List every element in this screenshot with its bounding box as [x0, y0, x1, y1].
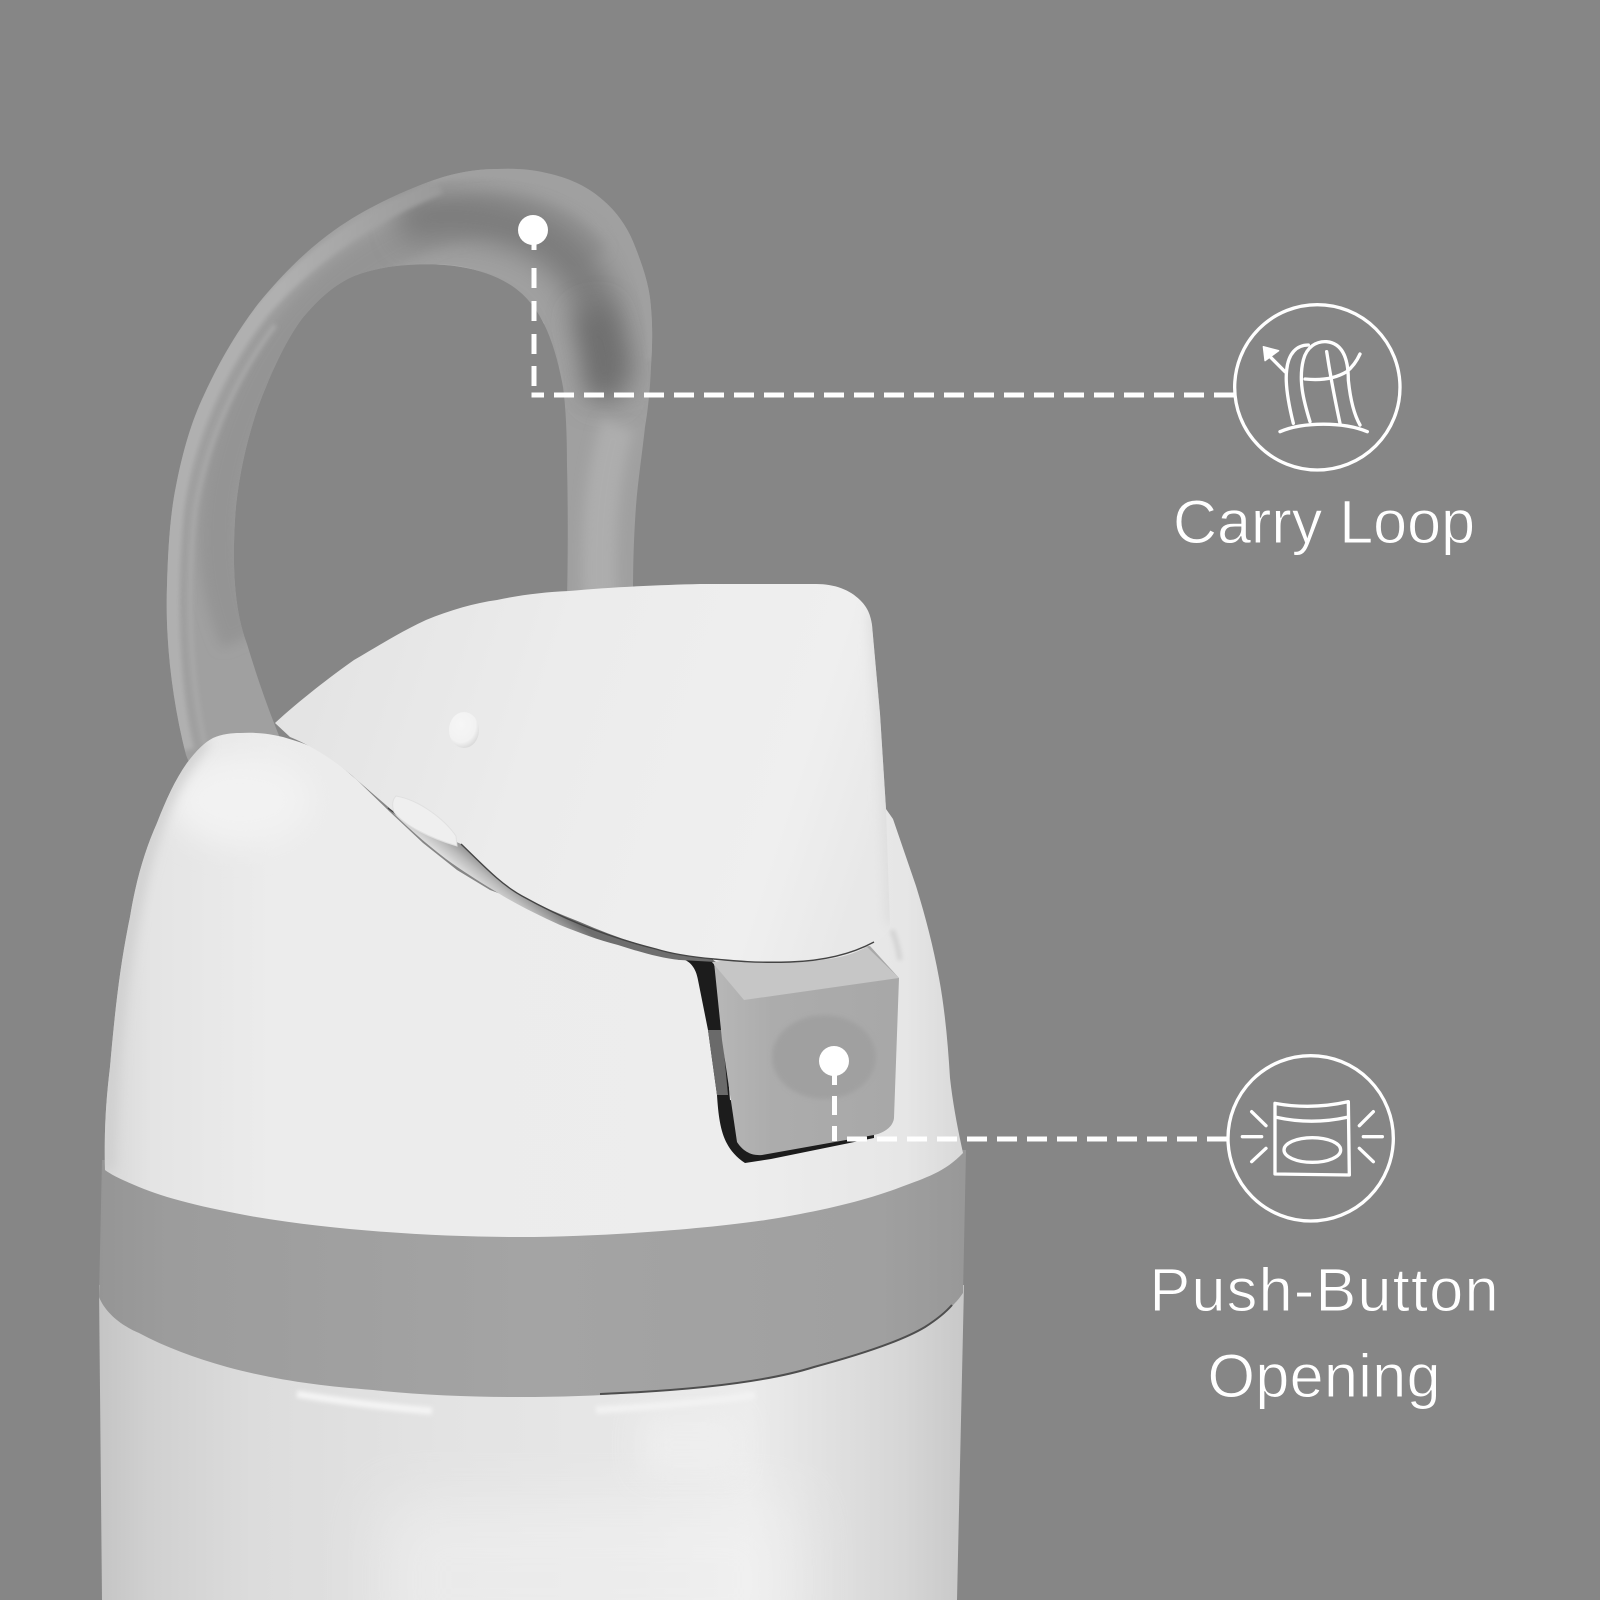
- cap right edge shading: [870, 618, 886, 810]
- body highlights: [296, 1390, 680, 1414]
- bottle: [99, 150, 966, 1600]
- button recess: [679, 955, 874, 1163]
- band lower shadow line: [600, 1305, 952, 1394]
- label: Push-Button Opening: [1150, 1256, 1498, 1410]
- lid shoulder shading: [108, 740, 900, 1170]
- dot: push button: [819, 1046, 849, 1076]
- button recess ellipse: [772, 1015, 876, 1099]
- label: Carry Loop: Carry Loop: [1173, 488, 1475, 556]
- dot: carry loop: [518, 215, 548, 245]
- callout line: carry loop: [518, 215, 1234, 395]
- push button: [712, 946, 899, 1155]
- icon: push button: [1228, 1056, 1393, 1221]
- body lower section: [99, 1285, 964, 1600]
- callout line: push button: [819, 1046, 1228, 1141]
- recess lower shading: [708, 1030, 728, 1095]
- carry loop handle: [166, 168, 652, 761]
- button top facet: [712, 946, 899, 1000]
- label: Push-Button Opening: Push-Button: [1150, 1256, 1498, 1324]
- rivet: [449, 712, 479, 748]
- button front: [714, 946, 899, 1155]
- icon: carry loop: [1235, 305, 1400, 470]
- lid shoulder: [105, 733, 963, 1237]
- label: Push-Button Opening: Opening: [1208, 1342, 1440, 1410]
- cap hinge tab: [393, 796, 457, 846]
- gap shadow under cap: [388, 808, 716, 962]
- lid cap: [275, 584, 890, 963]
- silicone band: [99, 1150, 966, 1397]
- cap bottom edge shadow: [388, 808, 874, 962]
